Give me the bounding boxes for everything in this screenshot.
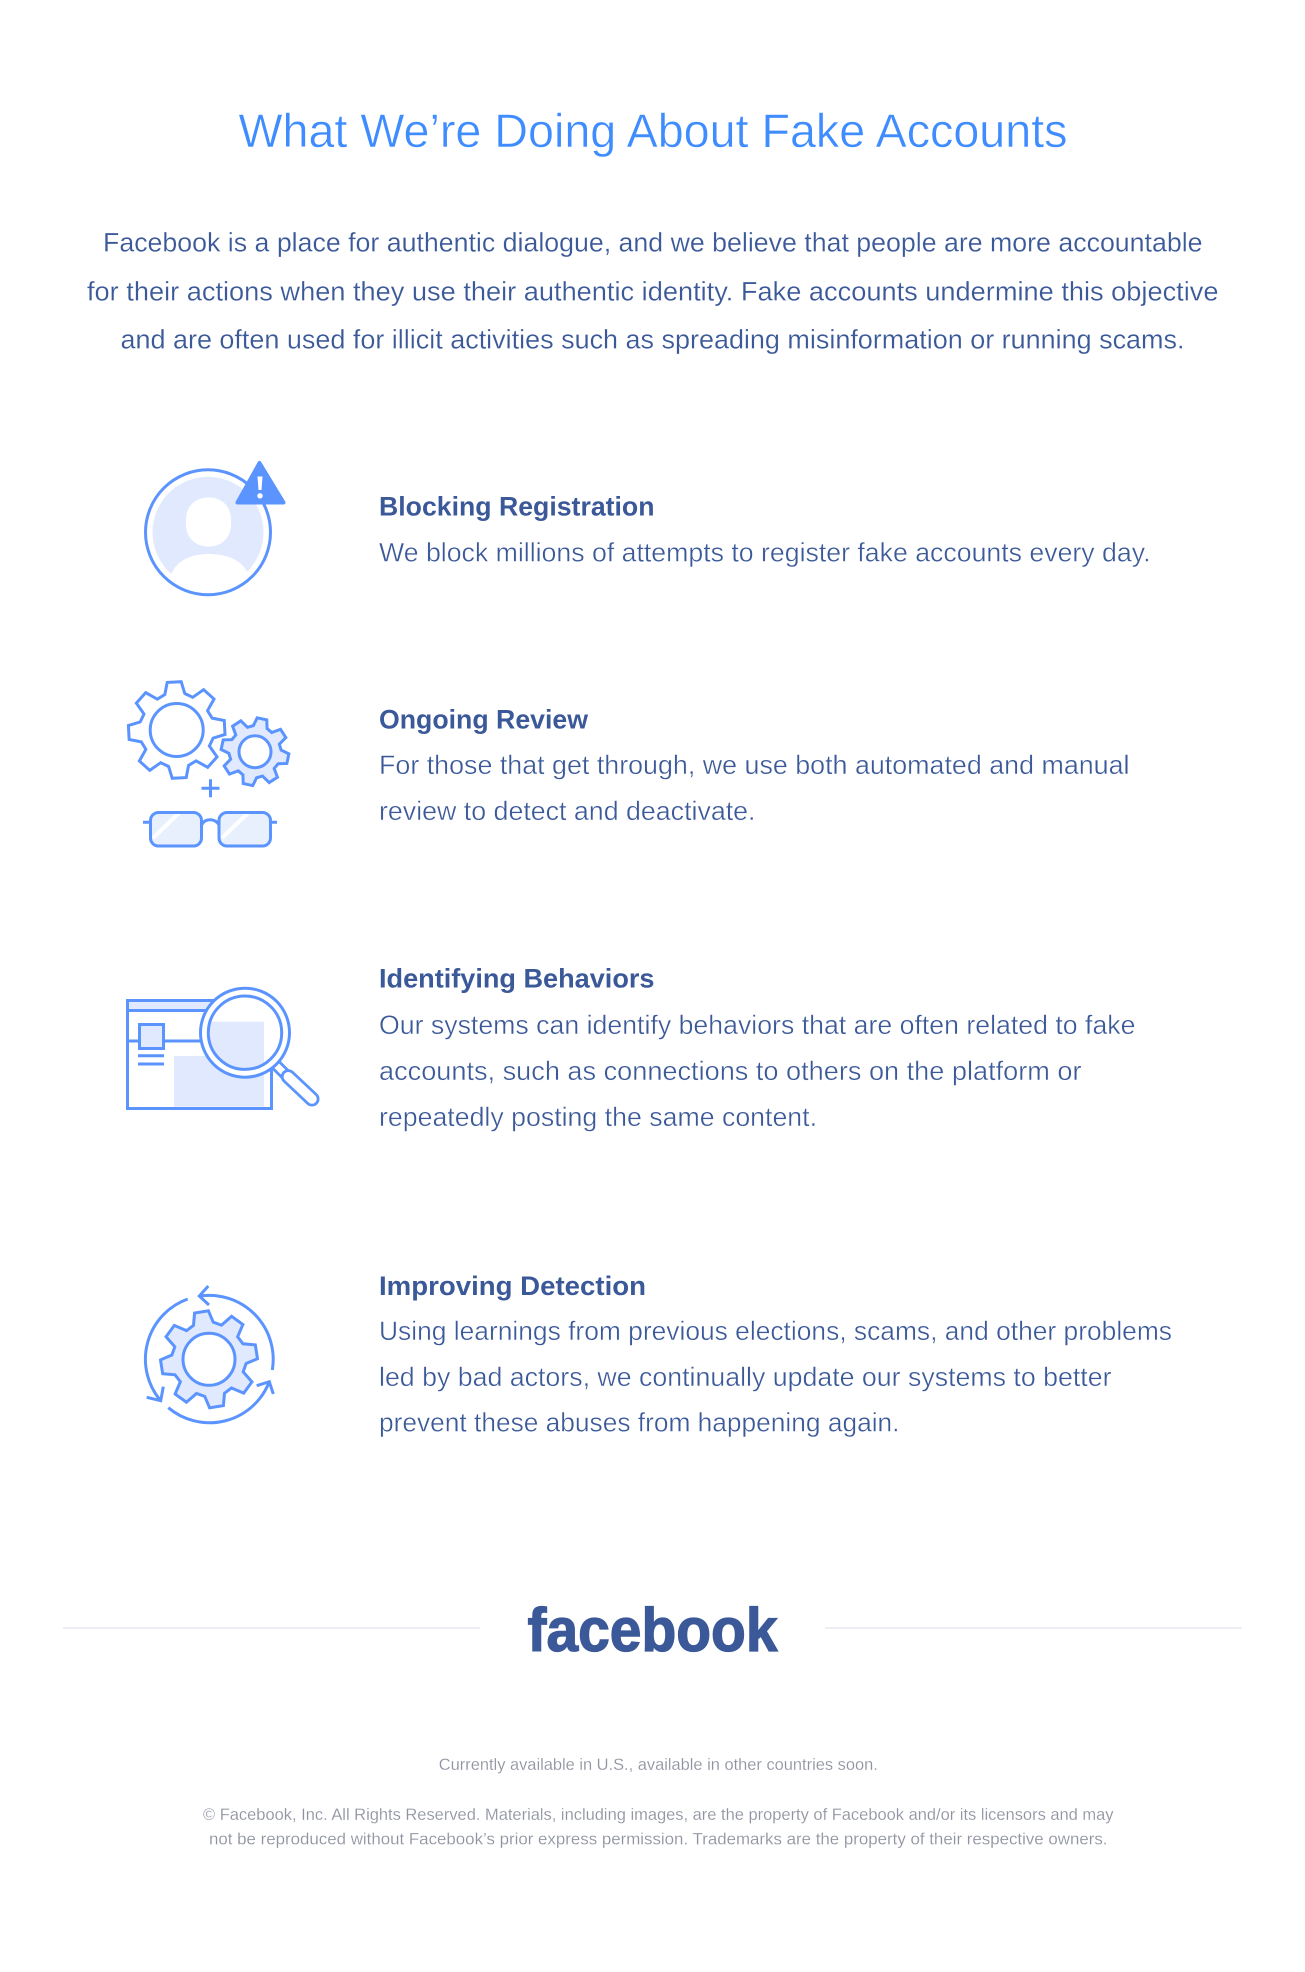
intro paragraph: and are often used for illicit activities such as spreading misinformation or running scams. — [120, 325, 1185, 355]
heading: blocking registration: Blocking Registration — [379, 491, 654, 521]
description: improving detection — [379, 1316, 1172, 1438]
panel: improving detection — [145, 1271, 1172, 1438]
heading: identifying behaviors: Identifying Behaviors — [379, 964, 654, 994]
description: blocking registration: We block millions of attempts to register fake accounts every day. — [379, 538, 1150, 568]
description: identifying behaviors: Our systems can identify behaviors that are often related to fake — [379, 1010, 1136, 1040]
icon: profile with warning triangle — [146, 463, 284, 595]
facebook logo: facebook — [528, 1596, 778, 1664]
footnote: copyright — [203, 1806, 1114, 1848]
description: identifying behaviors — [379, 1010, 1136, 1132]
panel: blocking registration — [146, 463, 1150, 595]
description: identifying behaviors: accounts, such as connections to others on the platform or — [379, 1056, 1082, 1086]
footnote: availability: Currently available in U.S., available in other countries soon. — [439, 1756, 878, 1774]
description: ongoing review: For those that get through, we use both automated and manual — [379, 750, 1130, 780]
heading: improving detection: Improving Detection — [379, 1271, 646, 1301]
icon: browser window with magnifier — [128, 988, 312, 1112]
intro paragraph: Facebook is a place for authentic dialogue, and we believe that people are more accountable — [103, 228, 1202, 258]
icon: gear with circular arrows — [145, 1286, 273, 1423]
description: improving detection: prevent these abuses from happening again. — [379, 1408, 900, 1438]
heading: ongoing review: Ongoing Review — [379, 705, 588, 735]
panel: identifying behaviors — [128, 964, 1136, 1132]
description: ongoing review — [379, 750, 1130, 826]
intro paragraph: for their actions when they use their authentic identity. Fake accounts undermine this objective — [87, 277, 1218, 307]
description: ongoing review: review to detect and deactivate. — [379, 796, 756, 826]
footnote: copyright: © Facebook, Inc. All Rights Reserved. Materials, including images, are the property of Facebook and/or its licensors and may — [203, 1806, 1114, 1824]
icon: gears and glasses — [126, 680, 295, 846]
description: identifying behaviors: repeatedly posting the same content. — [379, 1102, 817, 1132]
intro paragraph — [87, 228, 1218, 355]
infographic page — [63, 112, 1242, 1848]
panel: ongoing review — [126, 680, 1129, 846]
description: improving detection: Using learnings from previous elections, scams, and other problems — [379, 1316, 1172, 1346]
title: What We’re Doing About Fake Accounts — [238, 104, 1068, 157]
description: improving detection: led by bad actors, we continually update our systems to better — [379, 1362, 1112, 1392]
footnote: copyright: not be reproduced without Facebook’s prior express permission. Trademarks are the property of their respective owners. — [209, 1830, 1108, 1848]
